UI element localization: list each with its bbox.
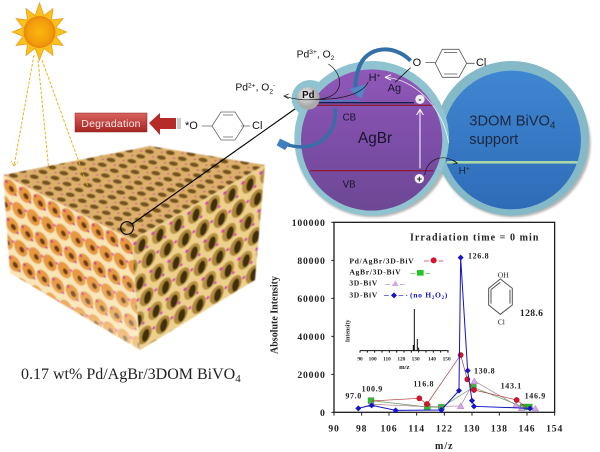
- particle shadows: [296, 69, 451, 217]
- label: Pd3+, O2: , O: [317, 49, 331, 60]
- inset spectrum: 130: [412, 356, 420, 362]
- legend: 2: [442, 296, 445, 301]
- curved arrow: CB to radical: [277, 108, 335, 150]
- label: Pd2+, O2-: 2+: [248, 82, 256, 89]
- molecule: 4-chlorophenol: 128.6: [520, 308, 543, 319]
- x axis title: m/z: [435, 441, 454, 452]
- inset spectrum: Intensity: [346, 320, 352, 342]
- label: Pd2+, O2-: , O: [256, 83, 269, 94]
- panel: AgBr sphere: [292, 61, 470, 216]
- axis ticks: [331, 222, 555, 416]
- y axis labels: 40000: [297, 332, 326, 343]
- arrow: zoom pointer from block to Pd: [121, 103, 303, 234]
- inset spectrum: m/z: [399, 364, 410, 371]
- label: H+: +: [377, 73, 381, 80]
- molecule: 4-chlorophenol: OH: [498, 270, 509, 279]
- label: Pd2+, O2-: 2: [269, 88, 273, 95]
- inset spectrum: 110: [383, 356, 391, 362]
- peak labels: [345, 252, 546, 401]
- inset spectrum: 100: [369, 356, 377, 362]
- axes frame: [334, 222, 555, 412]
- series: Pd/AgBr/3D-BiV: [372, 352, 527, 408]
- x axis labels: 90: [328, 424, 340, 435]
- inset spectrum: 90: [357, 356, 363, 362]
- panel: 3DOM BiVO4 support sphere: 4: [550, 120, 556, 131]
- thin reaction arrows: [284, 64, 368, 100]
- panel: AgBr sphere: -: [418, 94, 422, 104]
- series: AgBr/3D-BiV: [368, 384, 532, 410]
- legend: AgBr/3D-BiV: [349, 268, 401, 277]
- y axis title: Absolute Intensity: [269, 276, 280, 354]
- peak labels: 130.8: [474, 367, 495, 376]
- y axis labels: 0: [320, 408, 326, 419]
- inset spectrum: [346, 309, 451, 371]
- caption: 4: [235, 373, 241, 385]
- chlorophenol molecule: O: [413, 57, 422, 69]
- block: right face: [132, 165, 265, 350]
- chart title: Irradiation time = 0 min: [410, 233, 539, 244]
- legend: 3D-BiV: [349, 279, 378, 288]
- panel: AgBr sphere: +: [417, 174, 423, 184]
- caption: 0.17 wt% Pd/AgBr/3DOM BiVO: [21, 366, 235, 383]
- x axis labels: 154: [546, 424, 563, 435]
- x axis labels: 146: [518, 424, 535, 435]
- icon: sun: [12, 3, 66, 60]
- curved arrow: phenol to H+: [349, 49, 411, 99]
- radical chlorophenoxy molecule: [185, 112, 262, 140]
- x axis labels: 98: [356, 424, 367, 435]
- panel: AgBr sphere: CB: [343, 112, 356, 123]
- sun rays: [11, 55, 88, 187]
- legend: O: [435, 291, 442, 300]
- arrow: to degradation: [149, 113, 180, 135]
- peak labels: 100.9: [362, 385, 383, 394]
- panel: 3DOM BiVO4 support sphere: support: [469, 132, 518, 148]
- chlorophenol molecule: [395, 49, 486, 82]
- panel: AgBr sphere: VB: [343, 179, 356, 190]
- label: Pd3+, O2: 2: [331, 55, 335, 62]
- y axis labels: 80000: [297, 256, 326, 267]
- peak labels: 97.0: [345, 392, 362, 401]
- y axis labels: [292, 218, 326, 419]
- scheme: photocatalyst particles: [235, 49, 591, 217]
- molecule: 4-chlorophenol: Cl: [498, 317, 505, 326]
- peak labels: 126.8: [468, 252, 489, 261]
- x axis labels: 122: [436, 424, 453, 435]
- peak labels: 146.9: [525, 392, 546, 401]
- inset spectrum: 140: [428, 356, 436, 362]
- radical chlorophenoxy molecule: Cl: [252, 120, 262, 132]
- x axis labels: 130: [463, 424, 480, 435]
- label: Pd2+, O2-: -: [273, 82, 275, 89]
- panel: 3DOM BiVO4 support sphere: 3DOM BiVO: [469, 114, 550, 130]
- label: H+: H: [369, 72, 377, 84]
- panel: AgBr sphere: H: [459, 166, 466, 177]
- Pd nanoparticle: [297, 87, 320, 110]
- legend: (no H: [410, 291, 432, 300]
- inset spectrum: 150: [443, 356, 451, 362]
- y axis labels: 20000: [297, 370, 326, 381]
- legend: 2: [432, 296, 435, 301]
- block: left face: [3, 175, 140, 350]
- panel: AgBr sphere: +: [466, 166, 470, 173]
- panel: AgBr sphere: AgBr: [358, 130, 392, 147]
- peak labels: 143.1: [501, 382, 522, 391]
- peak labels: 116.8: [413, 379, 434, 388]
- molecule: 4-chlorophenol: [489, 270, 543, 326]
- legend: ): [445, 291, 448, 300]
- Pd nanoparticle: Pd: [302, 90, 315, 101]
- legend: Pd/AgBr/3D-BiV: [349, 256, 414, 265]
- x axis labels: 106: [380, 424, 397, 435]
- x axis labels: 138: [491, 424, 508, 435]
- radical chlorophenoxy molecule: *O: [185, 120, 198, 132]
- label: Pd2+, O2-: Pd: [235, 83, 248, 94]
- panel: AgBr sphere: Ag: [388, 83, 401, 95]
- series: 3D-BiV no H2O2: [355, 255, 533, 413]
- mass spectrum chart: [269, 218, 563, 452]
- callout: degradation box: Degradation: [81, 118, 141, 130]
- legend: 3D-BiV: [349, 290, 378, 299]
- inset spectrum: 120: [397, 356, 406, 362]
- series: 3D-BiV: [358, 378, 539, 411]
- chlorophenol molecule: Cl: [476, 57, 486, 69]
- y axis labels: 100000: [292, 218, 326, 229]
- x axis labels: [328, 424, 563, 435]
- label: Pd3+, O2: Pd: [297, 49, 309, 60]
- panel: 3DOM BiVO4 support sphere: [434, 61, 589, 216]
- legend: [349, 256, 448, 301]
- callout: degradation box: [75, 113, 147, 132]
- x axis labels: 114: [408, 424, 425, 435]
- y axis labels: 60000: [297, 294, 326, 305]
- 3DOM BiVO4 porous block: [3, 146, 265, 350]
- block: top face: [3, 146, 265, 240]
- label: Pd3+, O2: 3+: [309, 49, 317, 56]
